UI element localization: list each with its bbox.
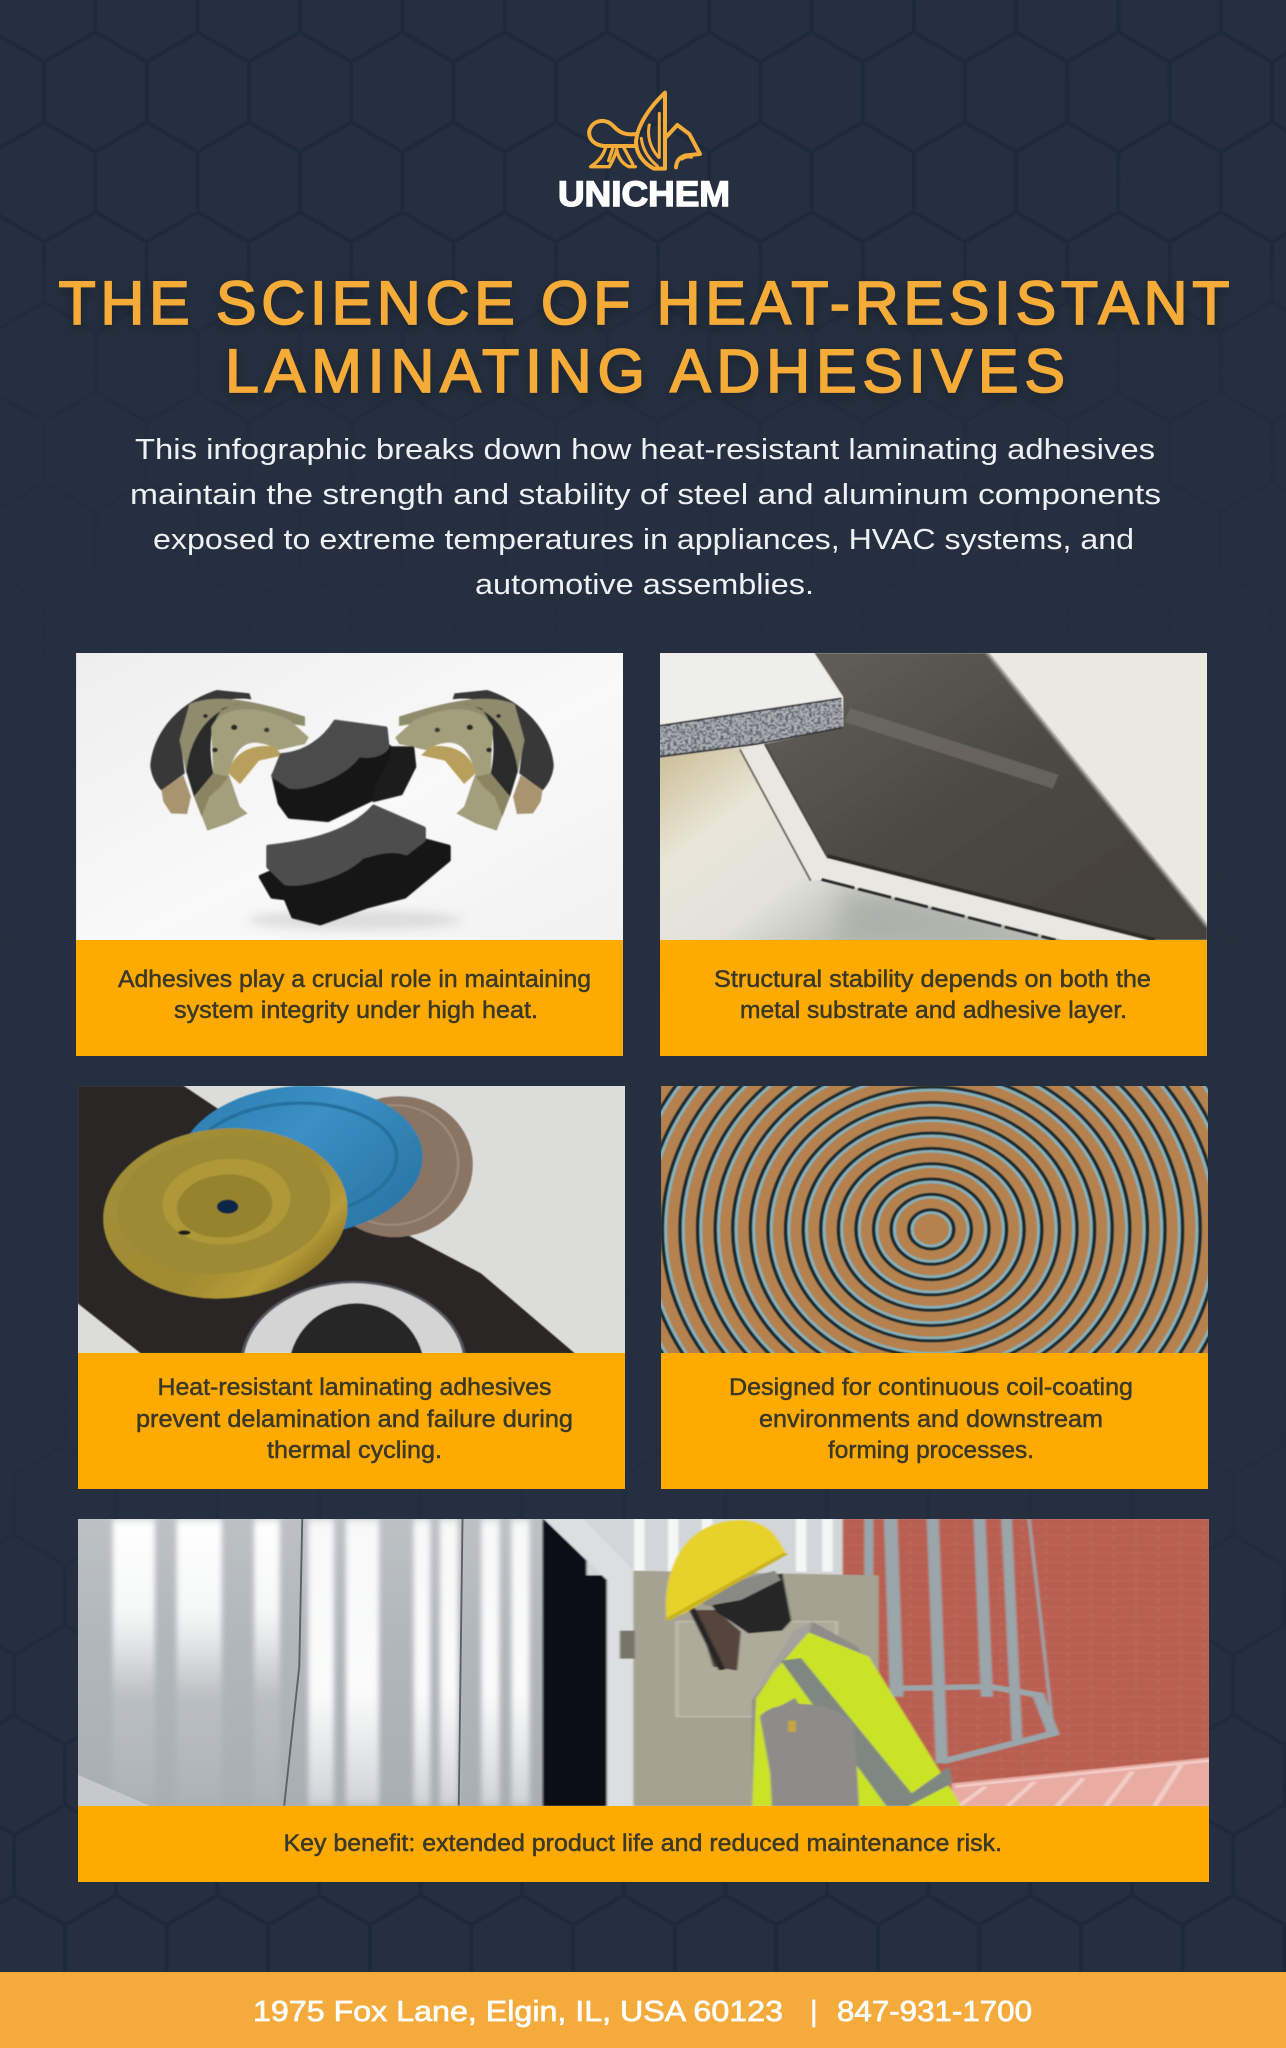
gold disc	[91, 1115, 360, 1312]
red brick wall	[842, 1519, 1210, 1806]
intro text block: This infographic breaks down how heat-resistant laminating adhesives	[135, 434, 1155, 466]
caption	[660, 940, 1207, 1056]
caption: Designed for continuous coil-coating	[729, 1374, 1133, 1401]
intro text block	[130, 434, 1161, 601]
caption	[78, 1806, 1209, 1882]
caption	[78, 1353, 625, 1489]
tiled roof	[952, 1757, 1210, 1806]
frame and background	[545, 1519, 842, 1806]
blue disc	[174, 1079, 428, 1243]
brake shoes: left set	[150, 690, 309, 831]
title: THE SCIENCE OF HEAT-RESISTANT	[58, 269, 1230, 337]
corrugated metal panels	[78, 1519, 543, 1806]
logo: Unichem griffin and wordmark	[558, 90, 730, 213]
panel: brake parts card	[76, 653, 623, 1056]
caption: prevent delamination and failure during	[136, 1406, 573, 1433]
dark sheet	[765, 653, 1207, 940]
footer contact bar: |	[810, 1996, 818, 2028]
photo: concentric coil	[661, 1086, 1208, 1353]
photo: coated metal discs on carbon strip	[78, 1086, 625, 1353]
panel: coil rings card	[661, 1086, 1208, 1489]
photo: laminated sheet edge	[660, 653, 1207, 940]
intro text block: exposed to extreme temperatures in appliances, HVAC systems, and	[153, 524, 1134, 556]
panel: laminated panel card	[660, 653, 1207, 1056]
caption: Structural stability depends on both the	[714, 966, 1151, 993]
photo: brake shoes and pads	[76, 653, 623, 940]
brake pad: front	[261, 807, 448, 923]
caption: environments and downstream	[759, 1406, 1103, 1433]
concrete panel	[620, 1571, 879, 1806]
caption	[76, 940, 623, 1056]
worker	[666, 1520, 961, 1806]
caption: forming processes.	[828, 1437, 1034, 1464]
fiberglass ring	[240, 1281, 467, 1449]
caption: Adhesives play a crucial role in maintaining	[118, 966, 591, 993]
caption: Heat-resistant laminating adhesives	[158, 1374, 552, 1401]
title	[58, 269, 1230, 405]
brake pad: back	[274, 722, 414, 820]
footer contact bar: 1975 Fox Lane, Elgin, IL, USA 60123	[253, 1996, 783, 2028]
dark gap	[543, 1519, 607, 1806]
caption: thermal cycling.	[267, 1437, 442, 1464]
intro text block: automotive assemblies.	[475, 569, 814, 601]
brake shoes: right set	[395, 690, 554, 831]
safety cage ladder	[869, 1519, 1053, 1763]
title: LAMINATING ADHESIVES	[225, 337, 1065, 405]
icon: griffin	[589, 93, 700, 169]
footer contact bar: 847-931-1700	[837, 1996, 1032, 2028]
caption: Key benefit: extended product life and reduced maintenance risk.	[284, 1830, 1002, 1857]
caption: metal substrate and adhesive layer.	[740, 997, 1127, 1024]
panel: key benefit card	[78, 1519, 1209, 1882]
top white panel	[660, 653, 841, 725]
caption	[661, 1353, 1208, 1489]
footer contact bar	[0, 1972, 1286, 2048]
intro text block: maintain the strength and stability of steel and aluminum components	[130, 479, 1161, 511]
photo: worker inspecting metal panels	[78, 1519, 1209, 1806]
foam core edge	[740, 744, 1155, 940]
brown disc	[306, 1084, 488, 1249]
wordmark: UNICHEM	[558, 175, 730, 213]
caption: system integrity under high heat.	[174, 997, 538, 1024]
carbon strip	[78, 1086, 575, 1354]
panel: coated discs card	[78, 1086, 625, 1489]
